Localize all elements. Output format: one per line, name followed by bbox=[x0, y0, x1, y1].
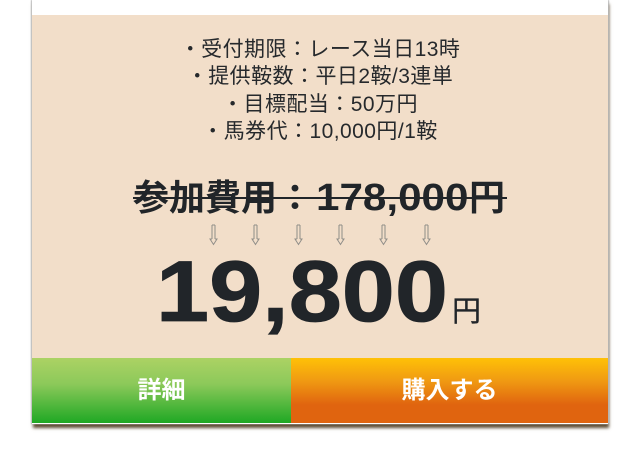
button: details bbox=[32, 358, 291, 423]
icon: six down arrows bbox=[209, 224, 431, 246]
original price, struck through: 参加費用： bbox=[133, 177, 313, 218]
original price, struck through bbox=[133, 177, 507, 219]
detail: deadline: ・受付期限：レース当日13時 bbox=[180, 38, 460, 61]
text block: details list bbox=[180, 38, 460, 143]
detail: target payout: ・目標配当：50万円 bbox=[222, 93, 418, 116]
button: details: 詳細 bbox=[138, 377, 186, 404]
panel: details background bbox=[32, 15, 608, 359]
button: purchase bbox=[291, 358, 608, 423]
detail: ticket cost: ・馬券代：10,000円/1鞍 bbox=[202, 120, 438, 143]
detail: number of bets: ・提供鞍数：平日2鞍/3連単 bbox=[187, 65, 453, 88]
discounted price: 19,800 bbox=[156, 244, 448, 340]
original price, struck through: 円 bbox=[469, 177, 505, 218]
discounted price: 円 bbox=[452, 296, 481, 328]
original price, struck through: 178,000 bbox=[316, 177, 468, 219]
button: purchase: 購入する bbox=[402, 377, 498, 404]
